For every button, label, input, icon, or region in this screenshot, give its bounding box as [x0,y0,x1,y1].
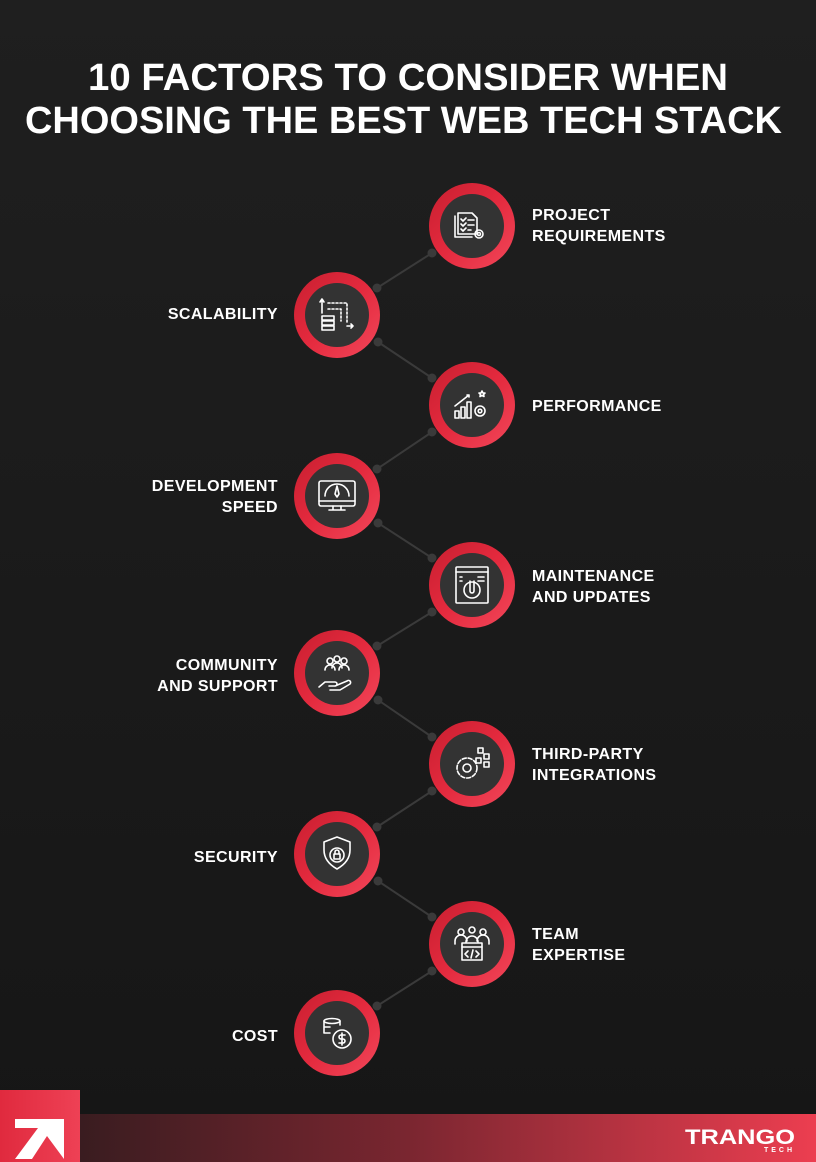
icon: gear with blocks [457,748,489,778]
icon: chart gear [455,391,485,418]
item 5: maintenance: MAINTENANCE [532,568,655,585]
item 3: performance [429,362,662,448]
icon: people on hand [319,656,351,690]
item 9: team expertise [429,901,625,987]
icon: scaling servers [320,299,353,330]
item 5: maintenance [429,542,655,628]
item 2: scalability: SCALABILITY [168,306,278,323]
item 7: third-party integrations: THIRD-PARTY [532,746,644,763]
item 8: security [194,811,380,897]
item 2: scalability [168,272,380,358]
item 5: maintenance: AND UPDATES [532,589,651,606]
item 4: development speed: SPEED [222,499,278,516]
footer bar [0,1114,816,1162]
icon: shield lock [324,837,350,869]
item 4: development speed: DEVELOPMENT [152,478,278,495]
item 3: performance: PERFORMANCE [532,398,662,415]
item 7: third-party integrations [429,721,657,807]
title [25,57,783,142]
item 6: community: COMMUNITY [176,657,278,674]
logo mark [0,1090,80,1162]
icon: checklist gear [455,213,483,238]
title: CHOOSING THE BEST WEB TECH STACK [25,100,783,142]
item 6: community [157,630,380,716]
item 6: community: AND SUPPORT [157,678,278,695]
icon: coins [324,1018,351,1048]
item 10: cost [232,990,380,1076]
item 4: development speed [152,453,380,539]
title: 10 FACTORS TO CONSIDER WHEN [88,57,728,99]
icon: team with code [455,927,489,960]
item 7: third-party integrations: INTEGRATIONS [532,767,657,784]
item 1: project requirements: PROJECT [532,207,610,224]
item 9: team expertise: EXPERTISE [532,947,625,964]
item 8: security: SECURITY [194,849,278,866]
icon: monitor speedometer [319,481,355,510]
item 1: project requirements [429,183,666,269]
item 1: project requirements: REQUIREMENTS [532,228,666,245]
icon: window wrench gear [456,567,488,603]
item 9: team expertise: TEAM [532,926,579,943]
item 10: cost: COST [232,1028,278,1045]
brand name: TRANGO [685,1126,795,1149]
connectors [374,250,436,1010]
brand name [685,1126,795,1154]
brand name: TECH [764,1147,795,1154]
